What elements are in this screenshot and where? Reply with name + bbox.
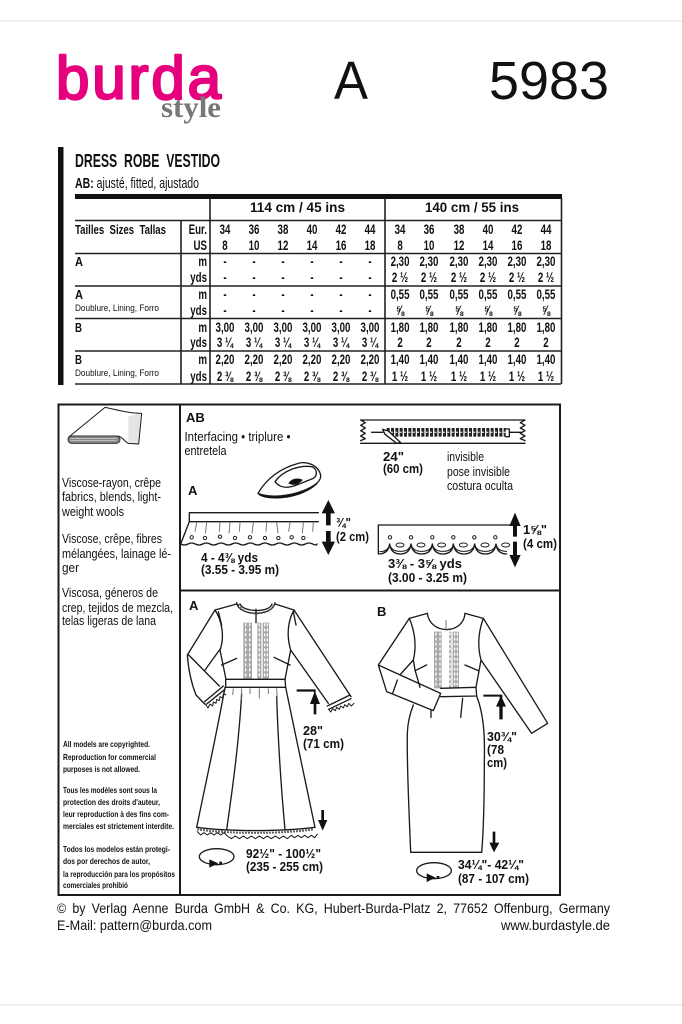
table values: ⅝: [542, 304, 551, 318]
fabric width 114: 114 cm / 45 ins: [250, 200, 345, 215]
table values: 1 ½: [392, 370, 408, 384]
row labels: Doublure, Lining, Forro: [75, 303, 159, 314]
lace A size: ¾": [336, 516, 351, 530]
copyright notice: protection des droits d'auteur,: [63, 797, 160, 807]
table values: -: [252, 288, 256, 302]
table values: 2,30: [479, 255, 498, 269]
table values: 3,00: [216, 321, 235, 335]
table values: 2,30: [420, 255, 439, 269]
table values: 2 ½: [392, 271, 408, 285]
table values: -: [339, 288, 343, 302]
table values: 44: [365, 223, 376, 237]
zipper type: pose invisible: [447, 465, 510, 479]
table values: -: [281, 288, 285, 302]
table values: 2: [397, 336, 403, 350]
table values: -: [223, 255, 227, 269]
table values: 3,00: [332, 321, 351, 335]
dress A hem value: [246, 847, 323, 874]
table values: ⅝: [455, 304, 464, 318]
row labels: B: [75, 320, 82, 335]
scalloped trim amount: 3⅜ - 3⅝ yds: [388, 557, 462, 571]
row labels: A: [75, 254, 84, 269]
table values: -: [281, 255, 285, 269]
scalloped trim amount: [388, 557, 467, 585]
arrow: dress B length: [483, 695, 506, 852]
table values: 0,55: [391, 288, 410, 302]
notions labels: A: [188, 483, 198, 498]
table values: 2 ½: [451, 271, 467, 285]
table values: 0,55: [479, 288, 498, 302]
table values: 1,80: [391, 321, 410, 335]
scalloped trim size: 1⅝": [523, 523, 547, 537]
table values: 0,55: [508, 288, 527, 302]
dress B hem value: (87 - 107 cm): [458, 872, 529, 886]
table values: -: [310, 255, 314, 269]
table values: ⅝: [484, 304, 493, 318]
icon: scalloped trim: [378, 525, 511, 554]
table values: 8: [397, 239, 403, 253]
table values: 0,55: [450, 288, 469, 302]
icon: hem width B: [417, 863, 451, 882]
table values: -: [281, 271, 285, 285]
table values: -: [252, 271, 256, 285]
lace A amount: [201, 551, 279, 577]
table values: -: [310, 304, 314, 318]
fabric suggestions: fabrics, blends, light-: [62, 490, 161, 504]
dress B length value: 30¾": [487, 730, 517, 744]
copyright notice: [63, 739, 175, 890]
copyright notice: Reproduction for commercial: [63, 752, 156, 762]
fabric suggestions: Viscosa, géneros de: [62, 586, 158, 600]
table values: 42: [512, 223, 523, 237]
zipper type: invisible: [447, 450, 484, 464]
lower panel frame: [58, 404, 560, 895]
table values: [216, 223, 556, 384]
unit labels: US: [194, 239, 207, 253]
table values: 2: [543, 336, 549, 350]
table values: 2: [456, 336, 462, 350]
table values: 34: [220, 223, 231, 237]
table values: 1,80: [450, 321, 469, 335]
table values: 40: [307, 223, 318, 237]
copyright notice: dos por derechos de autor,: [63, 856, 150, 866]
lace A size: [336, 516, 369, 544]
view label B: B: [377, 604, 386, 619]
dress B length value: (78: [487, 743, 504, 757]
table values: 14: [483, 239, 494, 253]
table values: -: [223, 271, 227, 285]
table values: -: [368, 271, 372, 285]
table values: -: [310, 271, 314, 285]
table values: 1,40: [391, 353, 410, 367]
table values: 2,20: [245, 353, 264, 367]
table values: 3 ¼: [217, 336, 234, 350]
row labels: Doublure, Lining, Forro: [75, 368, 159, 379]
table values: -: [281, 304, 285, 318]
table values: 2,30: [391, 255, 410, 269]
table values: -: [339, 271, 343, 285]
arrow: scalloped trim width: [509, 513, 521, 567]
unit labels: m: [198, 288, 207, 302]
arrow: lace A width: [322, 500, 335, 555]
row labels: Tailles Sizes Tallas: [75, 223, 166, 237]
copyright notice: comerciales prohibió: [63, 880, 128, 890]
table values: 2 ½: [538, 271, 554, 285]
zipper type: costura oculta: [447, 479, 513, 493]
logo: burda style: style: [161, 91, 221, 124]
copyright notice: la reproducción para los propósitos: [63, 869, 175, 879]
copyright notice: Todos los modelos están protegi-: [63, 844, 170, 854]
dress B hem value: [458, 858, 529, 886]
fabric suggestions: mélangées, lainage lé-: [62, 547, 171, 561]
table values: 2,20: [274, 353, 293, 367]
icon: zipper: [361, 420, 525, 443]
row labels: A: [75, 287, 84, 302]
table values: ⅝: [425, 304, 434, 318]
dress B length value: [487, 730, 517, 770]
table values: 2,30: [508, 255, 527, 269]
dress A hem value: (235 - 255 cm): [246, 860, 323, 874]
table values: 2 ⅜: [217, 370, 234, 384]
table values: 2,20: [303, 353, 322, 367]
table values: -: [252, 255, 256, 269]
unit labels: Eur.: [189, 223, 207, 237]
table values: 3 ¼: [304, 336, 321, 350]
table values: 2 ⅜: [304, 370, 321, 384]
arrow: dress A length: [297, 689, 327, 831]
fabric suggestions: weight wools: [61, 505, 124, 519]
table values: 36: [249, 223, 260, 237]
copyright notice: All models are copyrighted.: [63, 739, 150, 749]
lace A size: (2 cm): [336, 530, 369, 544]
table values: 2 ⅜: [275, 370, 292, 384]
unit labels: [189, 223, 207, 384]
table values: 1,40: [537, 353, 556, 367]
icon: hem width A: [199, 849, 234, 868]
table values: 2 ⅜: [333, 370, 350, 384]
table values: 2: [426, 336, 432, 350]
icon: gathered lace trim: [181, 513, 318, 545]
copyright notice: merciales est strictement interdite.: [63, 821, 174, 831]
copyright notice: leur reproduction à des fins com-: [63, 809, 169, 819]
table values: -: [368, 304, 372, 318]
table values: 2: [485, 336, 491, 350]
table values: 3,00: [303, 321, 322, 335]
table values: -: [223, 304, 227, 318]
lace A amount: 4 - 4⅜ yds: [201, 551, 258, 565]
table values: 10: [249, 239, 260, 253]
scalloped trim amount: (3.00 - 3.25 m): [388, 571, 467, 585]
fabric suggestions: telas ligeras de lana: [62, 614, 156, 628]
table values: 3,00: [361, 321, 380, 335]
table values: 36: [424, 223, 435, 237]
unit labels: yds: [190, 336, 207, 350]
table values: 3,00: [274, 321, 293, 335]
table values: ⅝: [513, 304, 522, 318]
fabric suggestions: crep, tejidos de mezcla,: [62, 601, 173, 615]
table values: 18: [541, 239, 552, 253]
pattern number: 5983: [489, 51, 609, 111]
table values: 2 ⅜: [246, 370, 263, 384]
table values: 3 ¼: [362, 336, 379, 350]
icon: iron: [258, 463, 321, 498]
notions labels: Interfacing • triplure •: [184, 430, 290, 444]
table values: 1,40: [420, 353, 439, 367]
table values: -: [368, 255, 372, 269]
table values: 34: [395, 223, 406, 237]
notions labels: [184, 410, 290, 498]
table values: 1,40: [479, 353, 498, 367]
unit labels: yds: [190, 271, 207, 285]
dress B drawing: [378, 613, 548, 852]
fabric suggestions: Viscose, crêpe, fibres: [62, 532, 162, 546]
dress A length value: [303, 724, 344, 751]
heading: DRESS ROBE VESTIDO: [75, 151, 220, 171]
view letter: A: [334, 51, 368, 111]
fabric suggestions: [61, 476, 173, 628]
table values: -: [339, 304, 343, 318]
table values: -: [252, 304, 256, 318]
publisher footer: E-Mail: pattern@burda.com: [57, 917, 212, 933]
notions labels: AB: [186, 410, 205, 425]
table values: 1 ½: [421, 370, 437, 384]
table values: -: [310, 288, 314, 302]
table values: 1,40: [508, 353, 527, 367]
table values: 2 ⅜: [362, 370, 379, 384]
table values: 44: [541, 223, 552, 237]
lace A amount: (3.55 - 3.95 m): [201, 563, 279, 577]
yardage table: [75, 194, 562, 384]
table values: 1,40: [450, 353, 469, 367]
table values: 1,80: [537, 321, 556, 335]
table values: 12: [278, 239, 289, 253]
table values: 42: [336, 223, 347, 237]
fabric width 140: 140 cm / 55 ins: [425, 200, 519, 215]
table values: 2,20: [361, 353, 380, 367]
table values: 2 ½: [480, 271, 496, 285]
dress B length value: cm): [487, 756, 507, 770]
table values: 1 ½: [538, 370, 554, 384]
copyright notice: Tous les modèles sont sous la: [63, 785, 157, 795]
table values: 2 ½: [509, 271, 525, 285]
unit labels: yds: [190, 370, 207, 384]
zipper length: (60 cm): [383, 462, 423, 476]
table values: 16: [512, 239, 523, 253]
table values: 1 ½: [480, 370, 496, 384]
table values: 0,55: [537, 288, 556, 302]
table values: 8: [222, 239, 228, 253]
fit description: AB: ajusté, fitted, ajustado: [75, 176, 199, 192]
table values: 2 ½: [421, 271, 437, 285]
table values: 0,55: [420, 288, 439, 302]
table values: 1,80: [508, 321, 527, 335]
notions labels: entretela: [184, 444, 227, 458]
table values: ⅝: [396, 304, 405, 318]
scalloped trim size: (4 cm): [523, 537, 557, 551]
zipper length: 24": [383, 450, 404, 464]
table values: 12: [454, 239, 465, 253]
table values: 2,20: [332, 353, 351, 367]
unit labels: m: [198, 353, 207, 367]
zipper type: [447, 450, 513, 493]
table values: 2: [514, 336, 520, 350]
table values: -: [223, 288, 227, 302]
table values: 38: [454, 223, 465, 237]
zipper length: [383, 450, 423, 476]
table values: 3 ¼: [246, 336, 263, 350]
dress A hem value: 92½" - 100½": [246, 847, 321, 861]
table values: 40: [483, 223, 494, 237]
view label A: A: [189, 598, 199, 613]
table values: 1,80: [479, 321, 498, 335]
dress A length value: (71 cm): [303, 737, 344, 751]
table values: 1 ½: [451, 370, 467, 384]
publisher footer: © by Verlag Aenne Burda GmbH & Co. KG, Hubert-Burda-Platz 2, 77652 Offenburg, Germany: [57, 900, 610, 916]
side bar: [58, 147, 64, 385]
table values: 18: [365, 239, 376, 253]
table values: 2,30: [537, 255, 556, 269]
unit labels: yds: [190, 304, 207, 318]
icon: folded fabric: [68, 407, 142, 444]
table values: 3 ¼: [333, 336, 350, 350]
fabric suggestions: Viscose-rayon, crêpe: [62, 476, 161, 490]
scalloped trim size: [523, 523, 557, 551]
table values: -: [339, 255, 343, 269]
dress A length value: 28": [303, 724, 323, 738]
logo: burda style: burda: [56, 44, 222, 112]
table values: 1,80: [420, 321, 439, 335]
table values: 14: [307, 239, 318, 253]
table values: 3 ¼: [275, 336, 292, 350]
dress A drawing: [187, 603, 354, 839]
table values: -: [368, 288, 372, 302]
unit labels: m: [198, 255, 207, 269]
fabric suggestions: ger: [62, 561, 79, 575]
table values: 38: [278, 223, 289, 237]
row labels: B: [75, 352, 82, 367]
row labels: [75, 223, 166, 379]
copyright notice: purposes is not allowed.: [63, 764, 140, 774]
table values: 3,00: [245, 321, 264, 335]
table values: 10: [424, 239, 435, 253]
publisher footer: www.burdastyle.de: [500, 917, 610, 933]
table values: 2,30: [450, 255, 469, 269]
dress B hem value: 34¼"- 42¼": [458, 858, 524, 872]
publisher footer: [57, 900, 610, 933]
table values: 16: [336, 239, 347, 253]
table values: 1 ½: [509, 370, 525, 384]
unit labels: m: [198, 321, 207, 335]
table values: 2,20: [216, 353, 235, 367]
